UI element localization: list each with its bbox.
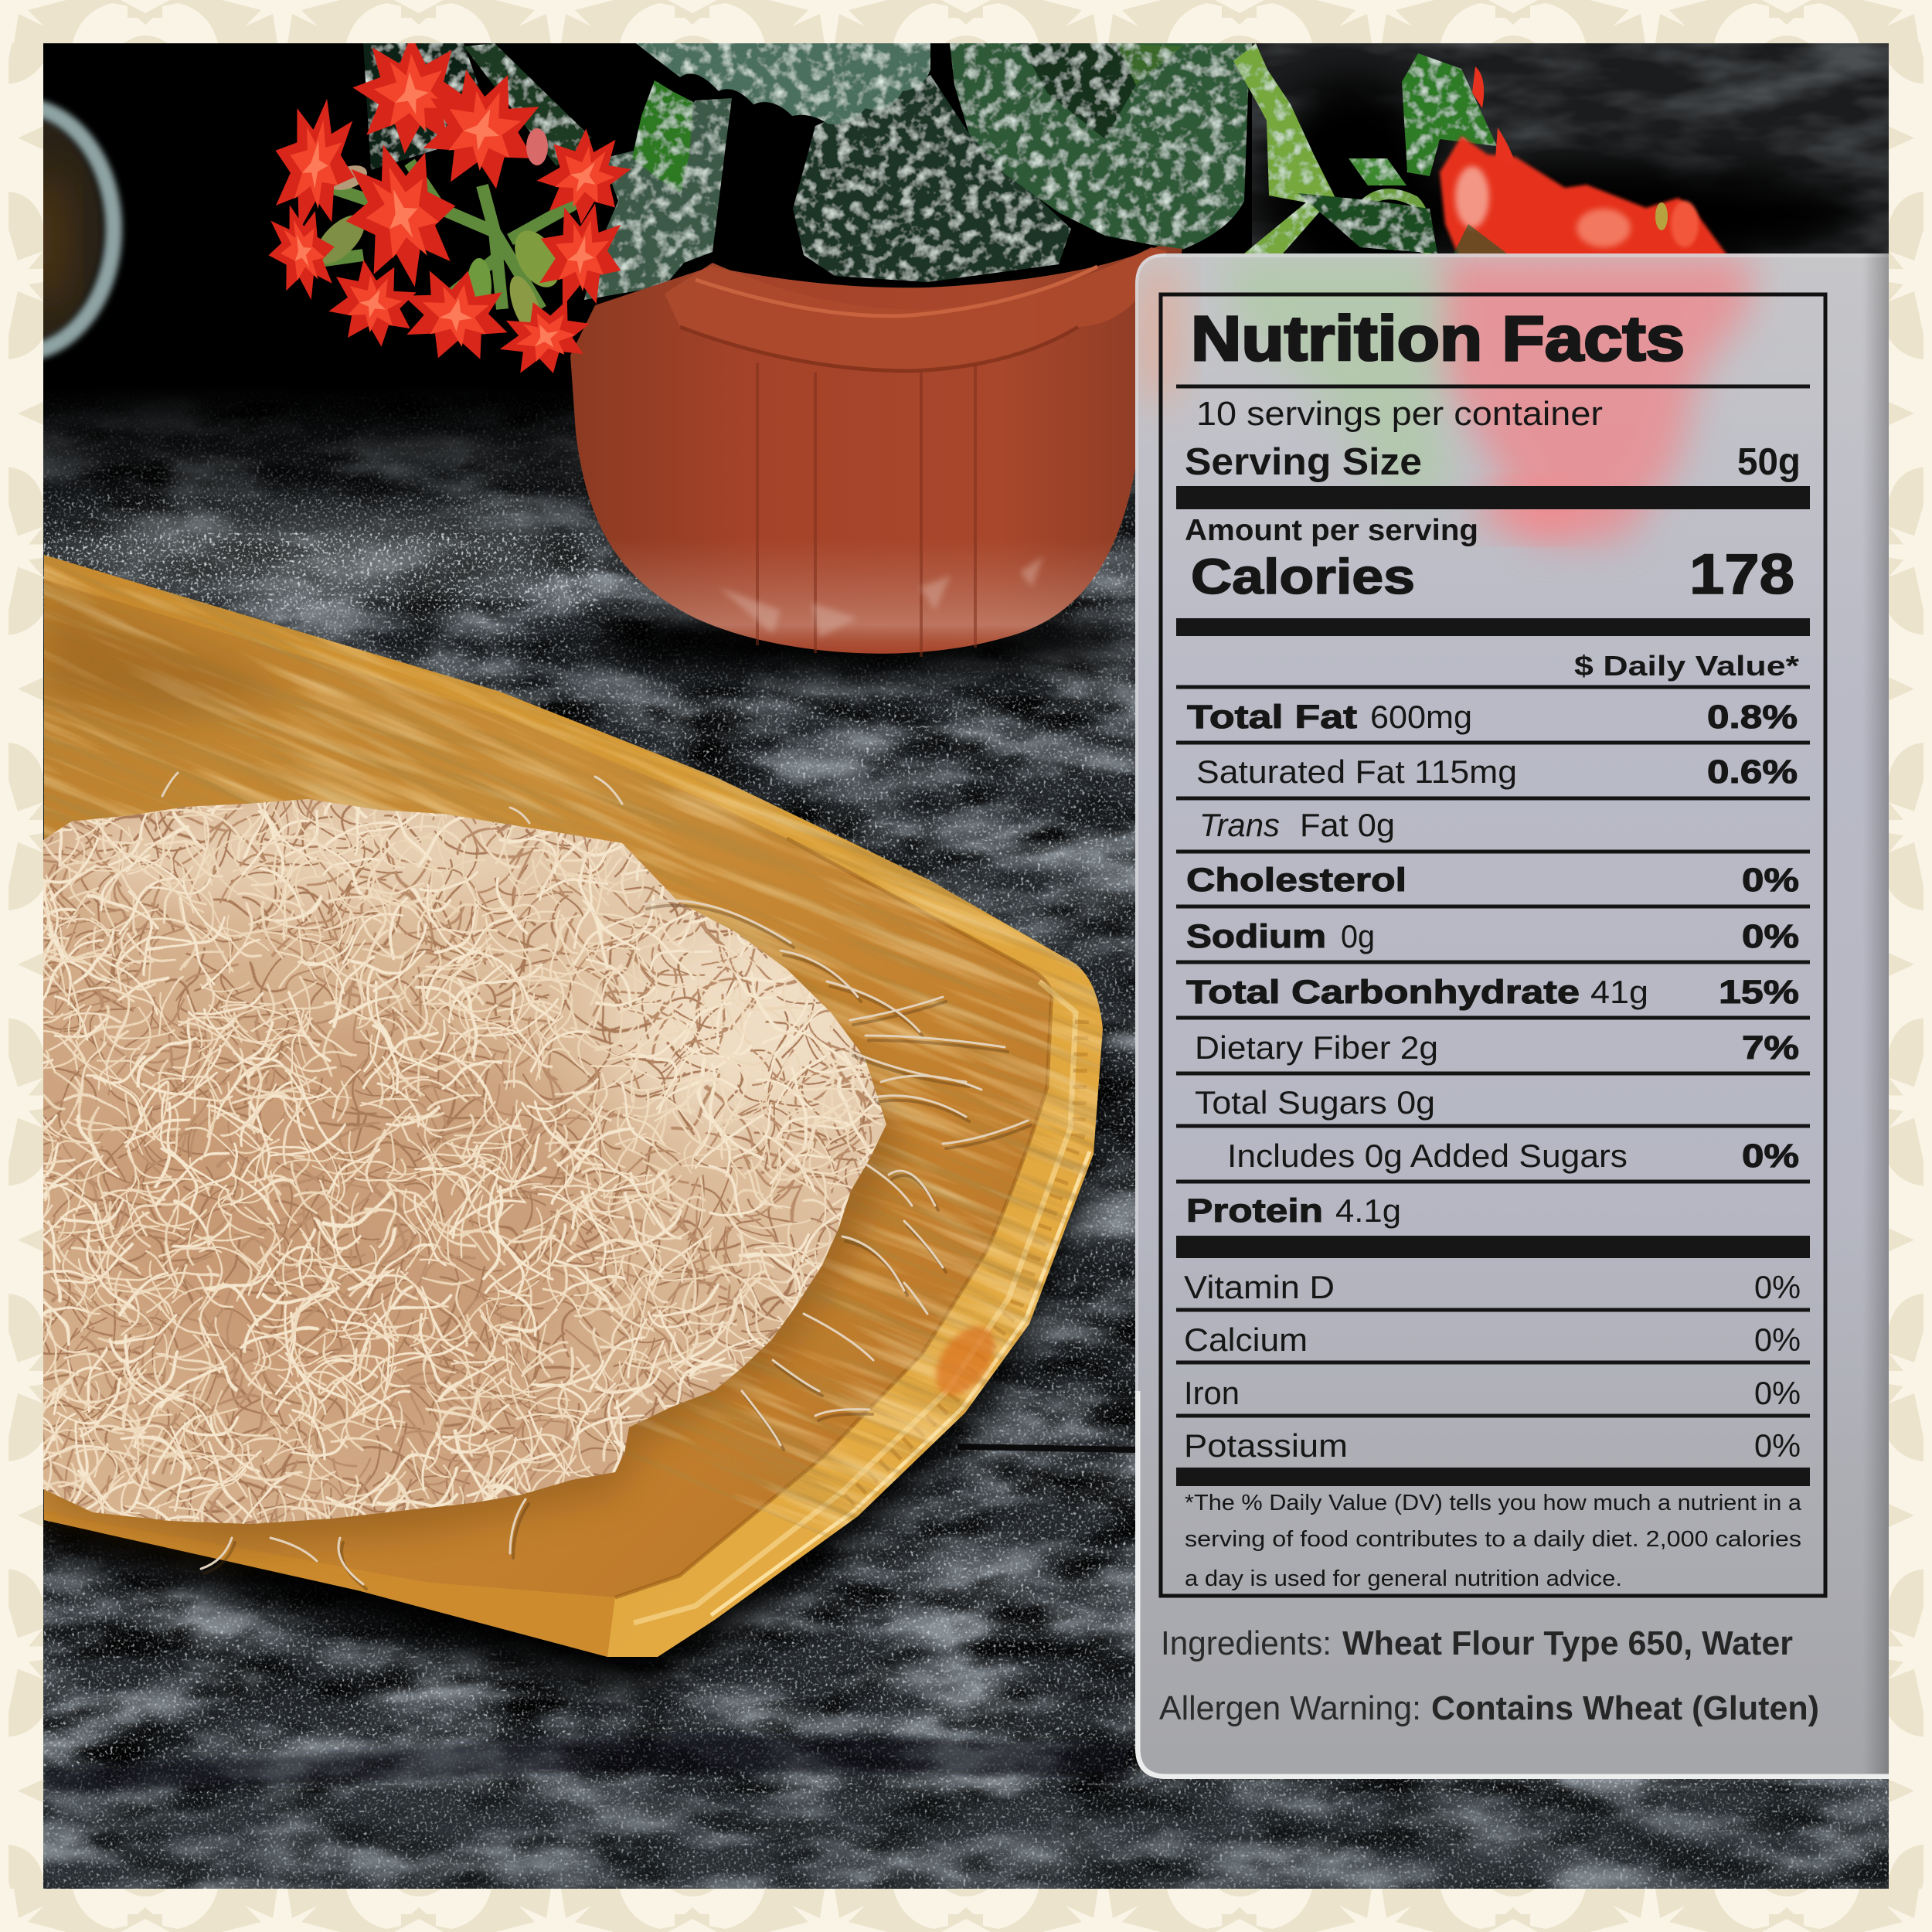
row: vitamin D: Vitamin D (1184, 1269, 1335, 1305)
ingredients line: Wheat Flour Type 650, Water (1342, 1624, 1793, 1662)
row: trans fat: Trans (1199, 807, 1280, 843)
plant leaves (363, 43, 1497, 300)
row: sodium (1186, 918, 1799, 955)
row: dietary fiber (1195, 1029, 1799, 1066)
stray noodle strands (162, 773, 1031, 1589)
row: potassium: 0% (1754, 1427, 1801, 1464)
row: dietary fiber: 7% (1742, 1029, 1799, 1066)
row: total fat: 600mg (1370, 699, 1472, 735)
row: cholesterol: Cholesterol (1186, 862, 1406, 899)
row: iron: Iron (1184, 1375, 1240, 1411)
ingredients line: Ingredients: (1161, 1624, 1332, 1662)
row: sodium: 0g (1341, 918, 1375, 954)
bamboo tray (0, 142, 1632, 1710)
row: sodium: Sodium (1186, 918, 1326, 955)
glass bowl at left edge (43, 96, 127, 363)
row: saturated fat (1196, 753, 1798, 791)
row: iron: 0% (1754, 1375, 1801, 1411)
row: total carbohydrate (1186, 974, 1799, 1011)
daily value footnote: *The % Daily Value (DV) tells you how much a nutrient in a (1185, 1491, 1802, 1515)
serving size row (1185, 441, 1801, 483)
row: saturated fat: Saturated Fat 115mg (1196, 753, 1517, 790)
calories row: Calories (1191, 549, 1415, 604)
row: vitamin D: 0% (1754, 1269, 1801, 1305)
servings per container: 10 servings per container (1196, 395, 1603, 433)
rules (1176, 386, 1810, 1486)
row: protein: Protein (1186, 1192, 1323, 1230)
row: total fat: 0.8% (1707, 699, 1798, 736)
daily value footnote: serving of food contributes to a daily diet. 2,000 calories (1185, 1527, 1801, 1552)
daily value header: $ Daily Value* (1574, 650, 1799, 682)
row: calcium: Calcium (1184, 1321, 1308, 1358)
amount per serving: Amount per serving (1185, 514, 1478, 547)
row: total carbohydrate: 41g (1590, 974, 1648, 1010)
red flower cluster, left (269, 43, 631, 373)
calories row: 178 (1689, 543, 1794, 606)
calories row (1191, 543, 1794, 606)
daily value footnote: a day is used for general nutrition advice. (1185, 1566, 1622, 1591)
noodle shadow on tray (44, 927, 900, 1546)
allergen warning line: Contains Wheat (Gluten) (1431, 1689, 1819, 1727)
row: total carbohydrate: Total Carbonhydrate (1186, 974, 1580, 1011)
allergen warning line (1159, 1689, 1819, 1727)
row: calcium (1184, 1321, 1801, 1358)
terracotta pot (570, 246, 1182, 657)
serving size row: 50g (1737, 441, 1801, 483)
row: total sugars: Total Sugars 0g (1195, 1084, 1435, 1121)
row: dietary fiber: Dietary Fiber 2g (1195, 1029, 1438, 1066)
frosted nutrition panel (1132, 251, 1893, 1783)
row: calcium: 0% (1754, 1321, 1801, 1358)
row: protein: 4.1g (1335, 1192, 1401, 1229)
nutrition facts label (1161, 294, 1825, 1596)
row: potassium: Potassium (1184, 1427, 1348, 1464)
row: trans fat (1199, 807, 1395, 843)
row: added sugars: Includes 0g Added Sugars (1227, 1138, 1628, 1174)
row: added sugars (1227, 1138, 1799, 1175)
allergen warning line: Allergen Warning: (1159, 1689, 1421, 1727)
pot shadow (580, 603, 1136, 680)
row: cholesterol: 0% (1742, 862, 1799, 899)
blurred flowers behind glass (1437, 255, 1750, 541)
red flower cluster, right (continues behind panel) (1440, 66, 1733, 263)
row: cholesterol (1186, 862, 1799, 899)
heading: Nutrition Facts: Nutrition Facts (1191, 304, 1685, 374)
row: vitamin D (1184, 1269, 1801, 1305)
label frame (1161, 294, 1825, 1596)
shredded kunafa noodle pile (15, 773, 920, 1546)
daily value footnote (1185, 1491, 1802, 1591)
row: saturated fat: 0.6% (1707, 753, 1798, 791)
serving size row: Serving Size (1185, 441, 1422, 483)
row: sodium: 0% (1742, 918, 1799, 955)
row: total carbohydrate: 15% (1719, 974, 1799, 1011)
row: added sugars: 0% (1742, 1138, 1799, 1175)
row: protein (1186, 1192, 1401, 1230)
row: total fat (1187, 699, 1798, 736)
row: total fat: Total Fat (1187, 699, 1357, 736)
row: trans fat: Fat 0g (1300, 807, 1395, 843)
row: iron (1184, 1375, 1801, 1411)
row: potassium (1184, 1427, 1801, 1464)
